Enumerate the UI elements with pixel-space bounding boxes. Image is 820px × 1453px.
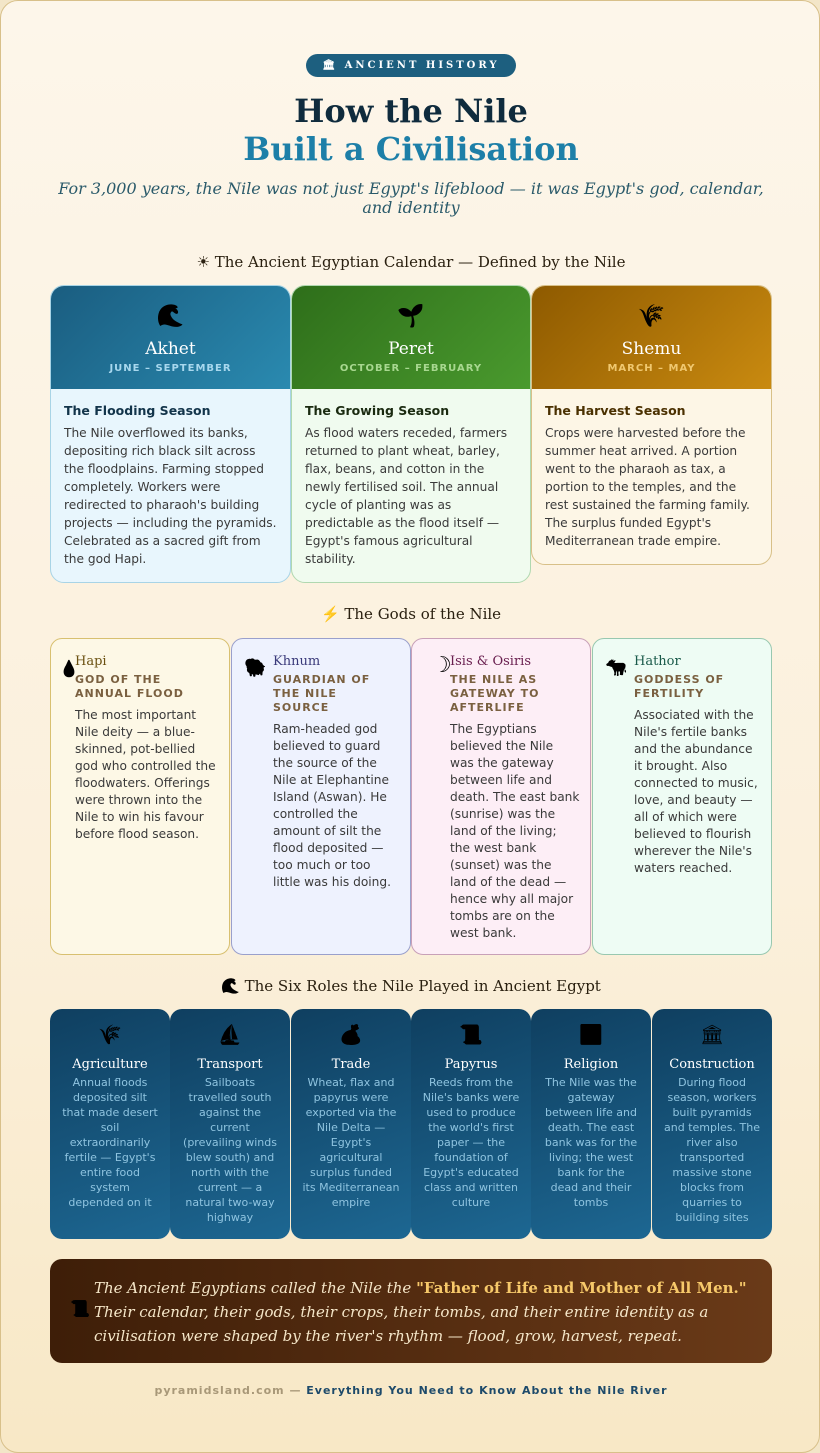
role: Construction bbox=[652, 1009, 772, 1239]
panel: Hapi: 💧 bbox=[59, 659, 79, 678]
panel: Peret: The Growing Season bbox=[305, 403, 449, 418]
section heading: roles: 🌊 The Six Roles the Nile Played in Ancient Egypt bbox=[221, 977, 601, 995]
panel: Isis & Osiris: ☽ bbox=[432, 653, 452, 678]
panel: Khnum bbox=[231, 638, 411, 955]
quote text: The Ancient Egyptians called the Nile the "Father of Life and Mother of All Men." Their calendar, their gods, their crops, their tombs, and their entire identity as a civilisation were shaped by the river's rhythm — flood, grow, harvest, repeat. bbox=[94, 1279, 747, 1345]
panel: Hapi: GOD OF THE ANNUAL FLOOD bbox=[75, 673, 184, 700]
role: Agriculture: Agriculture bbox=[72, 1057, 148, 1072]
panel: Isis & Osiris: The Egyptians believed the Nile was the gateway between life and death. The east bank (sunrise) was the land of the living; the west bank (sunset) was the land of the dead — hence why all major tombs are on the west bank. bbox=[450, 722, 579, 940]
panel: Peret: 🌱 bbox=[397, 304, 425, 329]
panel: Peret: Peret bbox=[388, 339, 434, 359]
panel: Isis & Osiris: Isis & Osiris bbox=[450, 654, 531, 669]
panel: Hathor bbox=[592, 638, 772, 955]
panel: Shemu: Crops were harvested before the summer heat arrived. A portion went to the pharaoh as tax, a portion to the temples, and the rest sustained the farming family. The surplus funded Egypt's Mediterranean trade empire. bbox=[545, 426, 750, 548]
panel: Isis & Osiris: THE NILE AS GATEWAY TO AFTERLIFE bbox=[450, 673, 539, 714]
panel: Akhet bbox=[50, 285, 291, 583]
role: Trade: 💰 bbox=[339, 1024, 363, 1046]
panel: Peret: OCTOBER – FEBRUARY bbox=[340, 363, 482, 374]
role: Religion: 🛐 bbox=[579, 1024, 603, 1046]
panel: Shemu bbox=[531, 285, 772, 565]
role: Transport: ⛵ bbox=[218, 1024, 242, 1046]
role: Construction: 🏛 bbox=[700, 1024, 724, 1046]
role: Agriculture: 🌾 bbox=[98, 1024, 122, 1046]
panel: Shemu: The Harvest Season bbox=[545, 403, 686, 418]
role: Trade: Wheat, flax and papyrus were exported via the Nile Delta — Egypt's agricultural surplus funded its Mediterranean empire bbox=[302, 1076, 400, 1209]
section heading: calendar: ☀ The Ancient Egyptian Calendar — Defined by the Nile bbox=[196, 253, 625, 271]
panel: Peret: As flood waters receded, farmers returned to plant wheat, barley, flax, beans, and cotton in the newly fertilised soil. The annual cycle of planting was as predictable as the flood itself — Egypt's famous agricultural stability. bbox=[305, 426, 507, 566]
role: Papyrus: Papyrus bbox=[445, 1057, 497, 1072]
panel: Hathor: Hathor bbox=[634, 654, 681, 669]
role: Papyrus bbox=[411, 1009, 531, 1239]
panel: Shemu: 🌾 bbox=[638, 304, 665, 329]
role: Transport: Transport bbox=[197, 1057, 263, 1072]
panel: Akhet: JUNE – SEPTEMBER bbox=[109, 363, 232, 374]
role: Religion: Religion bbox=[564, 1057, 618, 1072]
panel: Akhet: 🌊 bbox=[157, 304, 184, 329]
panel: Isis & Osiris bbox=[411, 638, 591, 955]
role: Construction: During flood season, workers built pyramids and temples. The river also transported massive stone blocks from quarries to building sites bbox=[664, 1076, 760, 1224]
panel: Akhet: The Nile overflowed its banks, depositing rich black silt across the floodplains. Farming stopped completely. Workers were redirected to pharaoh's building projects — including the pyramids. Celebrated as a sacred gift from the god Hapi. bbox=[64, 426, 276, 566]
panel: Shemu: Shemu bbox=[622, 339, 681, 359]
panel: Khnum: 🐏 bbox=[244, 657, 266, 678]
role: Religion bbox=[531, 1009, 651, 1239]
role: Papyrus: Reeds from the Nile's banks were used to produce the world's first paper — the foundation of Egypt's educated class and written culture bbox=[423, 1076, 519, 1209]
role: Transport bbox=[170, 1009, 290, 1239]
role: Agriculture bbox=[50, 1009, 170, 1239]
panel: Hathor: Associated with the Nile's fertile banks and the abundance it brought. Also connected to music, love, and beauty — all of which were believed to flourish wherever the Nile's waters reached. bbox=[634, 708, 758, 875]
panel: Hapi: Hapi bbox=[75, 654, 107, 669]
role: Papyrus: 📜 bbox=[459, 1024, 483, 1046]
role: Religion: The Nile was the gateway between life and death. The east bank was for the living; the west bank for the dead and their tombs bbox=[545, 1076, 637, 1209]
panel: Peret bbox=[291, 285, 531, 583]
panel: Akhet: Akhet bbox=[145, 339, 196, 359]
panel: Khnum: GUARDIAN OF THE NILE SOURCE bbox=[273, 673, 370, 714]
callout: quote bbox=[50, 1259, 772, 1363]
role: Trade bbox=[291, 1009, 411, 1239]
badge: 🏛 ANCIENT HISTORY bbox=[322, 60, 500, 71]
section heading: gods: ⚡ The Gods of the Nile bbox=[321, 605, 501, 623]
badge bbox=[306, 54, 516, 77]
role: Trade: Trade bbox=[332, 1057, 370, 1072]
panel: Hapi: The most important Nile deity — a blue-skinned, pot-bellied god who controlled the floodwaters. Offerings were thrown into the Nile to win his favour before flood season. bbox=[75, 708, 216, 841]
subtitle: For 3,000 years, the Nile was not just Egypt's lifeblood — it was Egypt's god, calendar, and identity bbox=[58, 179, 764, 217]
panel: Hathor: 🐄 bbox=[605, 657, 627, 678]
title: How the Nile bbox=[294, 92, 528, 130]
panel: Shemu: MARCH – MAY bbox=[607, 363, 696, 374]
role: Construction: Construction bbox=[669, 1057, 755, 1072]
title bbox=[243, 92, 579, 168]
panel: Hathor: GODDESS OF FERTILITY bbox=[634, 673, 724, 700]
role: Agriculture: Annual floods deposited silt that made desert soil extraordinarily fertile — Egypt's entire food system depended on it bbox=[62, 1076, 158, 1209]
panel: Khnum: Khnum bbox=[273, 654, 320, 669]
footer: pyramidsland.com — Everything You Need to Know About the Nile River bbox=[154, 1384, 668, 1397]
icon: scroll: 📜 bbox=[70, 1299, 90, 1318]
panel: Akhet: The Flooding Season bbox=[64, 403, 211, 418]
title: Built a Civilisation bbox=[243, 130, 579, 168]
panel: Khnum: Ram-headed god believed to guard the source of the Nile at Elephantine Island (Aswan). He controlled the amount of silt the flood deposited — too much or too little was his doing. bbox=[273, 722, 391, 889]
role: Transport: Sailboats travelled south against the current (prevailing winds blew south) and north with the current — a natural two-way highway bbox=[183, 1076, 277, 1224]
panel: Hapi bbox=[50, 638, 230, 955]
